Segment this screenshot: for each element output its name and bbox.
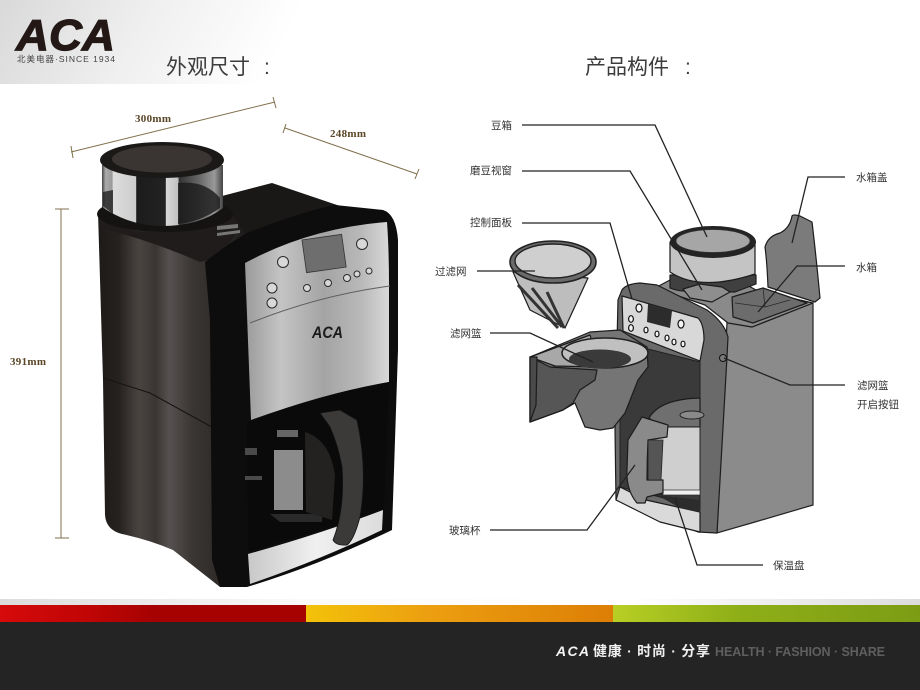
product photo: coffee machine <box>97 142 398 587</box>
warming plate base <box>616 487 700 532</box>
hopper base <box>670 275 756 292</box>
hopper <box>670 242 755 283</box>
filter basket <box>530 330 648 430</box>
dimension: 391mm height: 391mm <box>10 356 46 368</box>
basket shadow panel <box>530 357 597 422</box>
carafe glass <box>274 450 303 510</box>
logo: ACA: 北美电器·SINCE 1934 <box>17 54 115 64</box>
shoulder <box>98 206 240 262</box>
footer dark band <box>0 622 920 690</box>
leader lines <box>477 125 845 565</box>
hopper beans <box>178 183 220 224</box>
inner cavity <box>620 347 700 510</box>
buttons <box>629 304 685 347</box>
footer slogan: ACA <box>555 643 589 659</box>
part labels: 水箱 <box>856 261 877 274</box>
heading: 产品构件: : <box>685 56 691 79</box>
water tank <box>732 288 807 323</box>
dimension: 300mm width <box>71 97 276 158</box>
footer fade <box>0 599 920 605</box>
part labels: 豆箱 <box>491 119 512 132</box>
front frame <box>615 283 728 533</box>
dimension: 391mm height <box>10 209 69 538</box>
basket top face <box>530 335 600 367</box>
part labels: 控制面板 <box>470 216 512 229</box>
display <box>647 304 672 328</box>
carafe hot plate <box>657 495 700 512</box>
part labels: 滤网篮 <box>450 327 482 340</box>
part labels <box>435 119 899 572</box>
part labels: 过滤网 <box>435 265 466 278</box>
front frame <box>205 205 398 587</box>
carafe handle <box>320 410 363 545</box>
panel divider <box>250 286 390 323</box>
heading: 外观尺寸: 外观尺寸 <box>166 56 250 79</box>
body seam <box>103 378 246 433</box>
filter net <box>510 241 596 328</box>
dimension: 248mm depth: 248mm <box>330 128 366 140</box>
part labels: 开启按钮 <box>857 398 899 411</box>
dimension: 248mm depth <box>283 124 419 179</box>
part labels: 磨豆视窗 <box>470 164 512 177</box>
water tank lid <box>765 215 820 302</box>
part labels: 滤网篮 <box>857 379 888 392</box>
part labels: 水箱盖 <box>856 171 888 184</box>
part labels: 保温盘 <box>773 559 805 572</box>
panel buttons <box>267 238 372 308</box>
front logo: ACA <box>311 323 343 342</box>
control panel <box>622 296 704 361</box>
product diagram: exploded view <box>510 215 820 533</box>
header background band <box>0 0 300 84</box>
steel control panel <box>245 222 389 420</box>
machine side body <box>98 205 250 587</box>
part labels: 玻璃杯 <box>449 524 481 537</box>
machine right side panel <box>717 303 813 533</box>
footer slogan: HEALTH · FASHION · SHARE <box>715 645 885 659</box>
display <box>302 234 346 273</box>
hopper glass <box>102 165 223 226</box>
carafe lid <box>649 398 700 427</box>
upper housing <box>655 270 813 327</box>
footer slogan: 健康 · 时尚 · 分享 <box>593 643 710 659</box>
footer colour bar <box>0 605 920 622</box>
logo: ACA: ACA <box>15 11 115 60</box>
basket tab <box>530 357 537 422</box>
machine back top <box>222 183 340 245</box>
carafe bay <box>247 382 389 552</box>
hopper lid <box>100 142 224 178</box>
viewing window <box>683 284 730 302</box>
open button <box>720 354 726 362</box>
heading: 外观尺寸: : <box>264 56 270 79</box>
carafe <box>646 427 700 495</box>
footer slogan <box>555 643 885 659</box>
lower steel strip <box>248 510 383 584</box>
hopper collar <box>97 196 233 232</box>
dimension: 300mm width: 300mm <box>135 113 171 125</box>
control strips <box>217 224 240 236</box>
carafe handle <box>627 417 668 503</box>
heading: 产品构件: 产品构件 <box>585 56 669 79</box>
